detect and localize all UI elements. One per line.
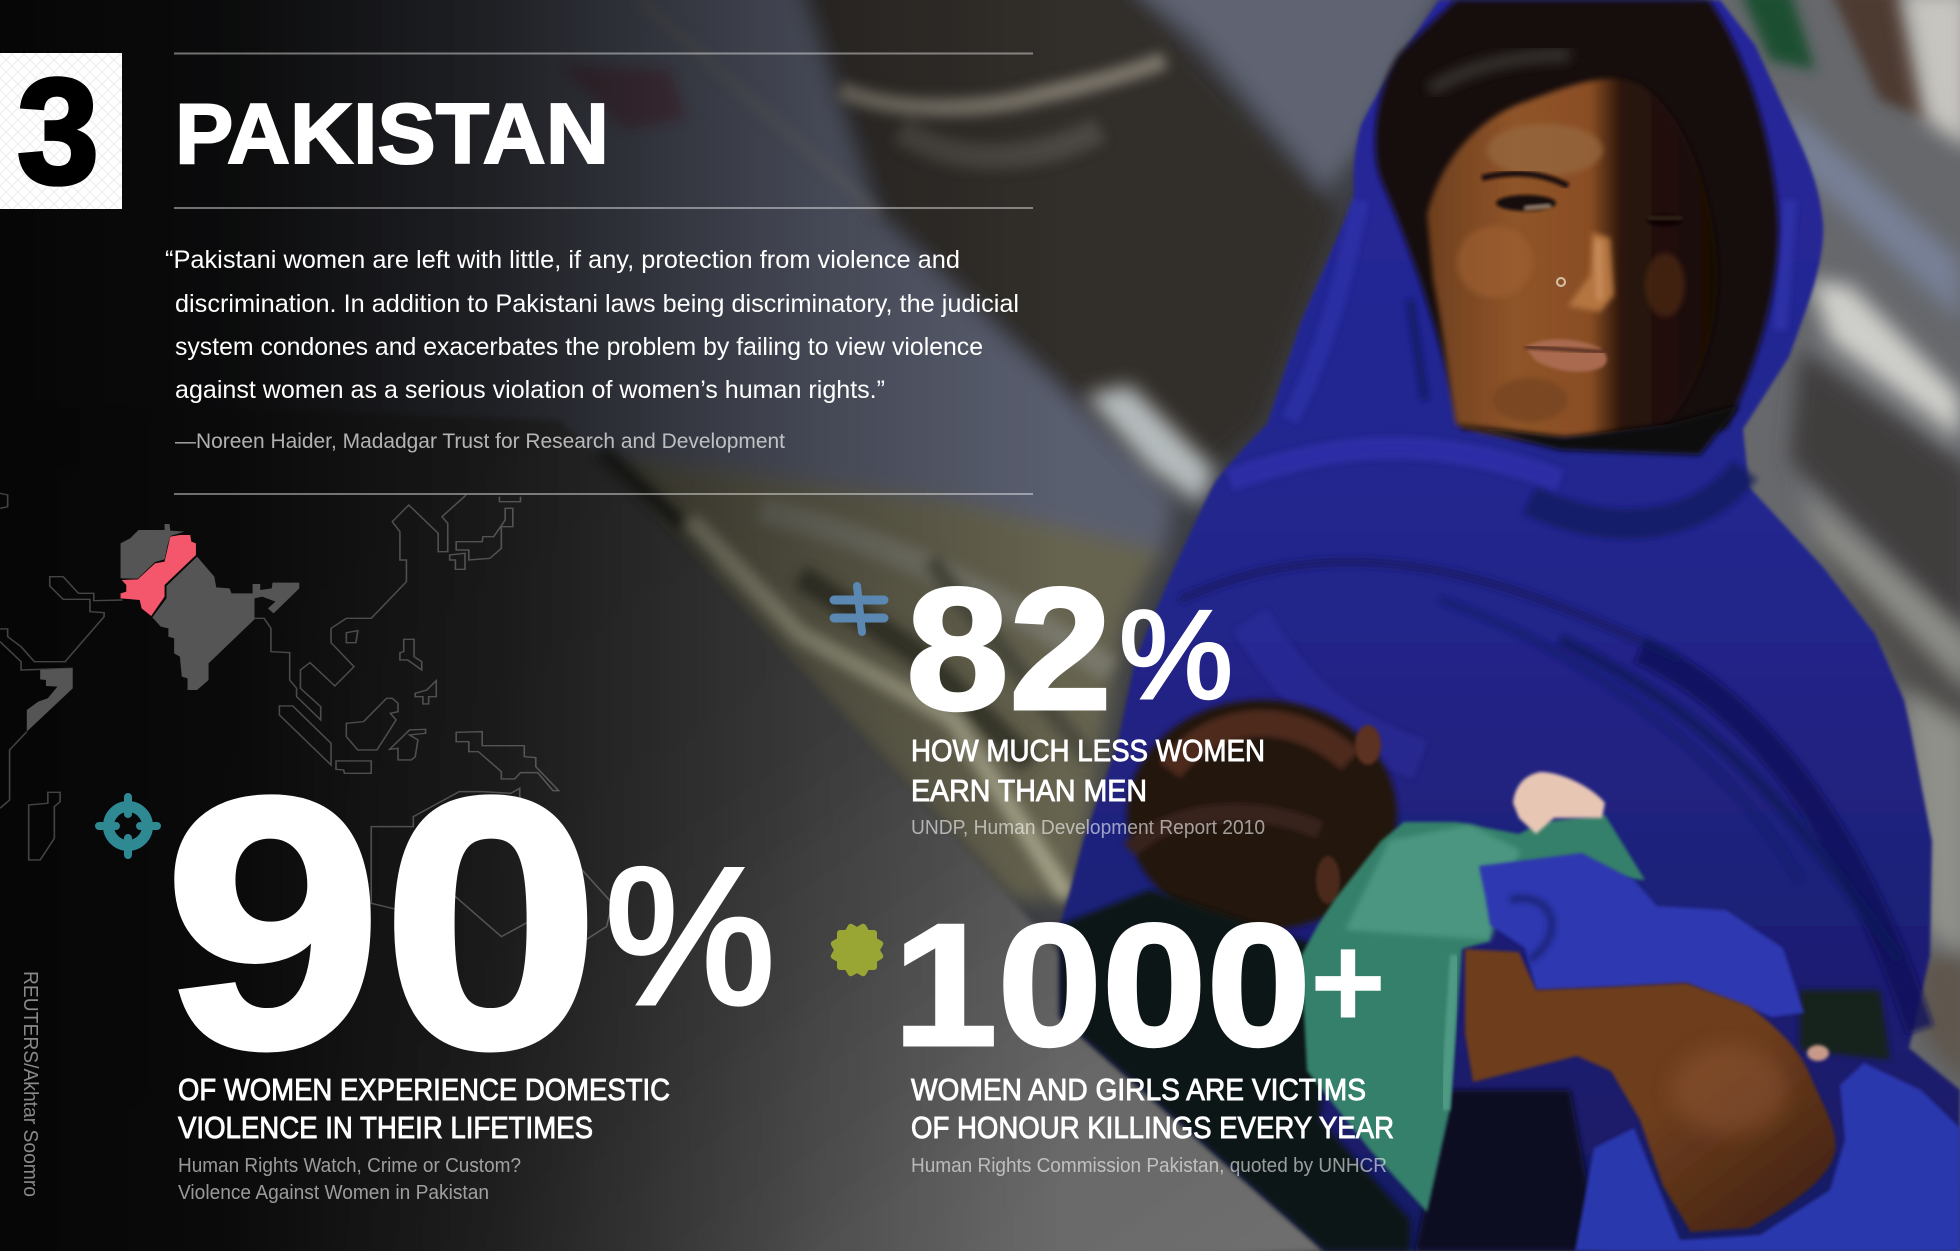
label: HOW MUCH LESS WOMEN <box>911 733 1265 768</box>
map: Pakistan highlighted <box>121 535 196 616</box>
title: PAKISTAN <box>175 87 609 182</box>
left brow <box>1482 174 1568 186</box>
left eye <box>1496 195 1556 211</box>
map: India <box>152 557 299 690</box>
baby head <box>1127 700 1397 930</box>
percent sign: % <box>1119 584 1233 725</box>
label: WOMEN AND GIRLS ARE VICTIMS <box>911 1072 1366 1107</box>
source: Human Rights Commission Pakistan, quoted by UNHCR <box>911 1155 1387 1177</box>
hand highlight <box>1672 1045 1788 1135</box>
baby green clothing <box>1301 815 1645 1212</box>
badge number: 3 <box>17 47 99 215</box>
map: outlines of neighbouring coasts <box>0 493 612 940</box>
map: Somalia region <box>27 668 73 732</box>
shawl folds <box>1180 200 1920 1030</box>
hair and hood shadow <box>1375 0 1778 429</box>
icon: target crosshair <box>99 797 157 855</box>
quote text block: discrimination. In addition to Pakistani laws being discriminatory, the judicial <box>175 290 1019 318</box>
mouth <box>1525 339 1607 372</box>
dark lower clothing <box>1060 890 1410 1251</box>
grey hair sheen <box>1430 55 1570 90</box>
quote text block: “Pakistani women are left with little, if any, protection from violence and <box>165 246 960 274</box>
stat: 90 percent: Violence Against Women in Pakistan <box>178 1182 489 1204</box>
big number 82: 82 <box>906 551 1112 746</box>
quote text block <box>165 246 1019 404</box>
percent sign: % <box>605 828 775 1045</box>
big number 90: 90 <box>164 725 600 1122</box>
green sleeve of baby robe <box>1445 955 1455 1110</box>
label: OF WOMEN EXPERIENCE DOMESTIC <box>178 1072 670 1107</box>
photo: mother with hood and baby <box>1060 0 1960 1251</box>
map of South and South-East Asia <box>0 493 612 940</box>
stat: 1000 plus <box>893 887 1394 1177</box>
rules <box>174 52 1033 495</box>
source: UNDP, Human Development Report 2010 <box>911 817 1265 839</box>
badge box <box>0 53 122 209</box>
photo credit: REUTERS/Akhtar Soomro <box>19 971 41 1197</box>
neck shadow <box>1456 405 1740 455</box>
stat: 82 percent: EARN THAN MEN <box>911 773 1147 808</box>
stat: 1000 plus: OF HONOUR KILLINGS EVERY YEAR <box>911 1110 1394 1145</box>
number badge <box>0 47 122 215</box>
quote text block: against women as a serious violation of women’s human rights.” <box>175 376 885 404</box>
lower blue cloth <box>1575 1063 1960 1251</box>
dark green right <box>1800 990 1890 1060</box>
icon: olive star <box>830 923 884 977</box>
blue cloth bundle <box>1479 853 1804 1017</box>
finger nail <box>1807 1045 1829 1061</box>
plus sign: + <box>1310 908 1386 1057</box>
face <box>1427 79 1718 439</box>
icon: not-equal symbol <box>834 586 884 632</box>
source: Human Rights Watch, Crime or Custom? <box>178 1155 521 1177</box>
baby hand <box>1513 772 1605 834</box>
stat: 90 percent: VIOLENCE IN THEIR LIFETIMES <box>178 1110 593 1145</box>
shawl silhouette <box>1060 0 1960 1251</box>
quote text block: system condones and exacerbates the problem by failing to view violence <box>175 333 983 361</box>
green highlights <box>1345 825 1520 940</box>
stat: 90 percent <box>164 725 775 1204</box>
map: Afghanistan <box>121 524 184 579</box>
right eye <box>1647 214 1683 226</box>
stat: 82 percent <box>906 551 1265 839</box>
quote attribution: —Noreen Haider, Madadgar Trust for Research and Development <box>175 430 785 453</box>
facial shading <box>1457 124 1685 422</box>
nose ring <box>1557 278 1565 286</box>
road surface <box>0 400 1325 1251</box>
cloth folds <box>1510 898 1552 960</box>
badge lattice <box>0 53 122 209</box>
mother arm and hand <box>1465 949 1835 1232</box>
ears <box>1355 725 1381 765</box>
big number 1000: 1000 <box>893 887 1311 1082</box>
